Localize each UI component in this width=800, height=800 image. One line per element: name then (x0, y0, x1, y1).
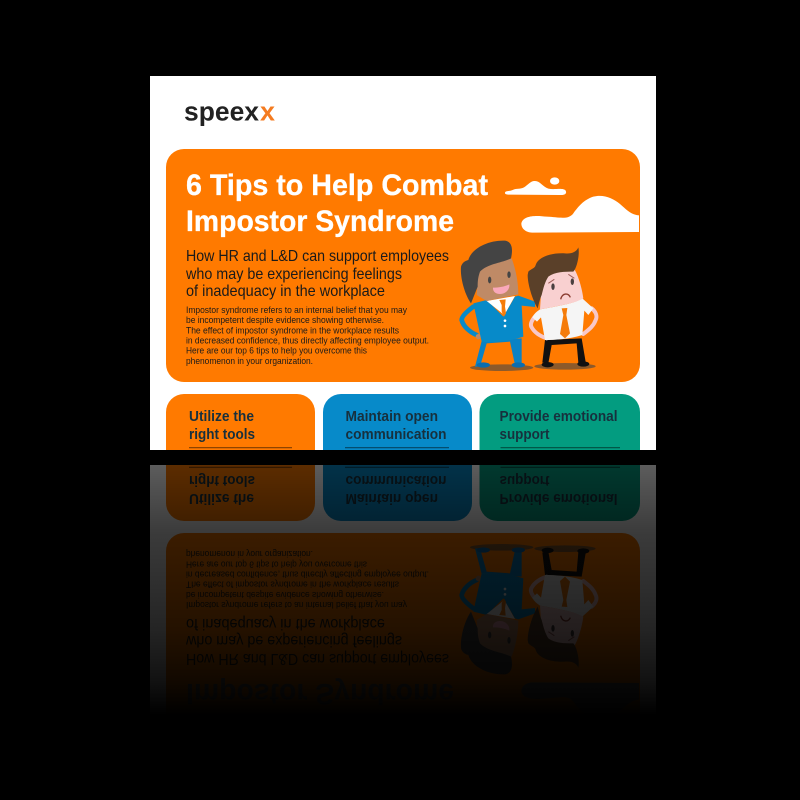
reflection of the infographic card: support (500, 472, 550, 488)
reflection of the infographic card: Impostor syndrome refers to an internal belief that you may (186, 600, 407, 611)
tip card: utilize the right tools: right tools (189, 427, 255, 443)
reflection of the infographic card: Impostor Syndrome (186, 677, 454, 710)
subtitle: of inadequacy in the workplace (186, 283, 385, 300)
tip card: provide emotional support: support (500, 427, 550, 443)
tip card: provide emotional support (480, 394, 640, 450)
reflection of the infographic card: Here are our top 6 tips to help you overcome this (186, 560, 367, 570)
subtitle (185, 248, 449, 300)
panel: hero (166, 149, 640, 382)
illustration: two businessmen (461, 241, 596, 371)
reflection of the infographic card: Provide emotional (500, 490, 618, 506)
reflection of the infographic card: in decreased confidence, thus directly affecting employee output. (186, 570, 429, 580)
intro paragraph: The effect of impostor syndrome in the workplace results (186, 324, 399, 336)
intro paragraph: Impostor syndrome refers to an internal belief that you may (186, 304, 407, 315)
reflection of the infographic card: communication (346, 472, 446, 488)
tip card: utilize the right tools (166, 394, 315, 450)
logo: speexx: x (260, 96, 275, 126)
intro paragraph: phenomenon in your organization. (186, 355, 313, 366)
subtitle: How HR and L&D can support employees (186, 248, 449, 265)
reflection of the infographic card: 6 Tips to Help Combat (186, 713, 488, 746)
intro paragraph: be incompetent despite evidence showing otherwise. (186, 314, 384, 325)
tip card: maintain open communication (323, 394, 472, 450)
title: 6 Tips to Help Combat (186, 169, 488, 202)
reflection of the infographic card: Maintain open (346, 490, 438, 506)
figure: worried man in white shirt (528, 247, 596, 370)
title: Impostor Syndrome (186, 205, 454, 238)
intro paragraph: in decreased confidence, thus directly affecting employee output. (186, 334, 429, 346)
logo: speexx: speex (184, 96, 259, 126)
title (186, 169, 488, 238)
reflection of the infographic card: of inadequacy in the workplace (186, 615, 385, 632)
tip card: maintain open communication: Maintain open (346, 409, 438, 425)
figure: man in blue suit (461, 241, 535, 371)
tip card: utilize the right tools: Utilize the (189, 409, 254, 425)
reflection of the infographic card: How HR and L&D can support employees (186, 650, 449, 667)
reflection of the infographic card: be incompetent despite evidence showing otherwise. (186, 590, 384, 601)
reflection of the infographic card: The effect of impostor syndrome in the workplace results (186, 580, 399, 590)
reflection of the infographic card: Utilize the (189, 490, 254, 506)
intro paragraph: Here are our top 6 tips to help you overcome this (186, 344, 367, 356)
logo: speexx (185, 106, 275, 126)
tip card: provide emotional support: Provide emotional (500, 409, 618, 425)
reflection of the infographic card: right tools (189, 472, 255, 488)
intro paragraph (186, 304, 429, 366)
infographic card (150, 76, 656, 450)
reflection of the infographic card (150, 465, 656, 700)
tip card: maintain open communication: communication (346, 427, 446, 443)
subtitle: who may be experiencing feelings (185, 266, 402, 283)
reflection of the infographic card: who may be experiencing feelings (185, 632, 402, 649)
reflection of the infographic card: phenomenon in your organization. (186, 549, 313, 560)
icon: clouds (505, 177, 639, 233)
